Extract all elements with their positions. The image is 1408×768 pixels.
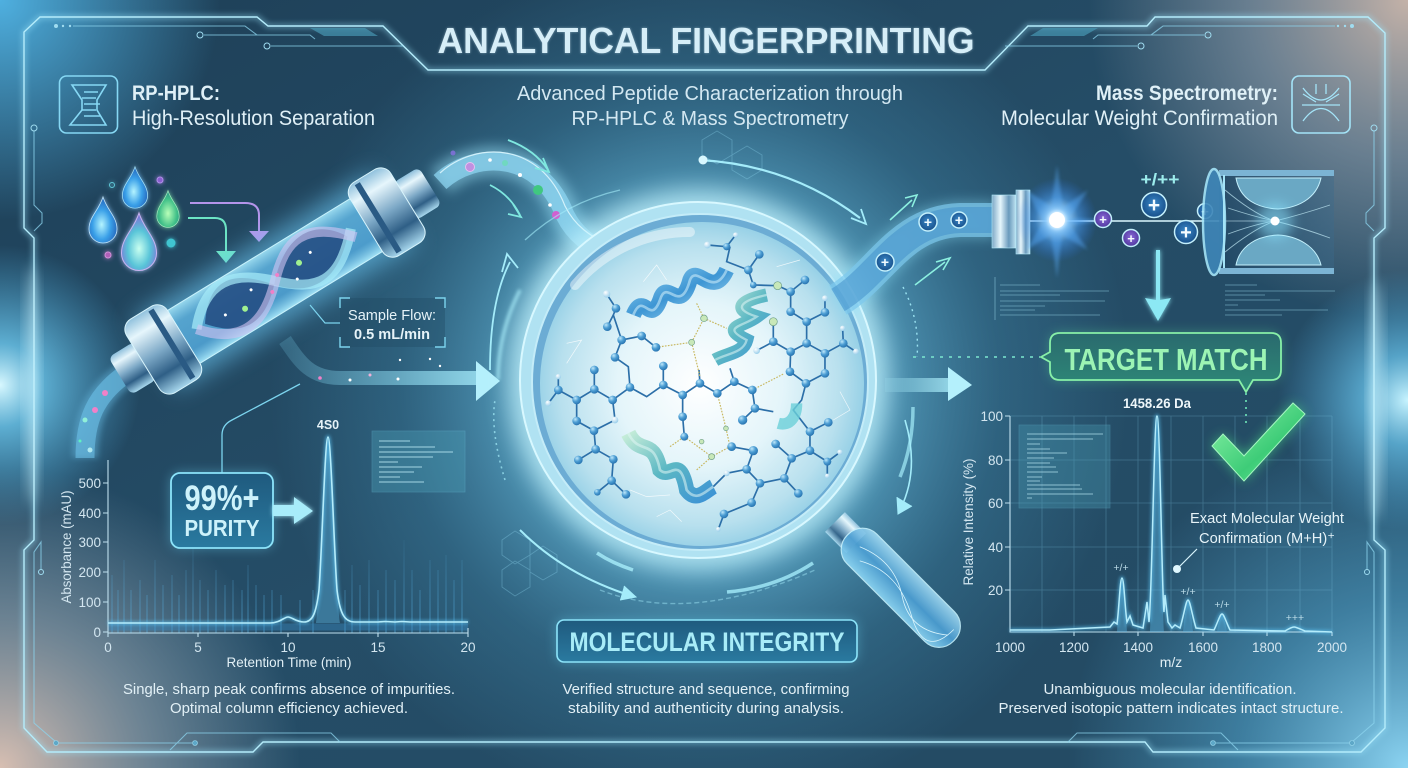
hydrogen bonds [656, 303, 783, 470]
trace [108, 437, 468, 623]
callout: sample flow [310, 298, 445, 347]
right cap [344, 149, 453, 262]
y axis title: Absorbance (mAU) [58, 490, 74, 604]
caption: HPLC: Single, sharp peak confirms absence of impurities. [123, 681, 455, 698]
y labels: 80 [988, 453, 1003, 468]
ions [1094, 170, 1212, 246]
x labels: 1200 [1059, 640, 1089, 655]
constellation lines [567, 260, 850, 522]
icon: ion trap [1292, 76, 1350, 133]
icon: check mark [1212, 403, 1305, 481]
tube into mass spectrometer: + [955, 212, 963, 228]
arrow: analyzer to target match [1145, 250, 1171, 321]
left cap [97, 300, 206, 413]
HPLC column [97, 149, 453, 413]
lower outlet tube [78, 373, 127, 458]
tube into mass spectrometer [838, 195, 995, 300]
annotation: Exact Molecular Weight [1190, 510, 1345, 527]
y tick labels: 300 [78, 535, 101, 550]
HPLC chromatogram [58, 384, 476, 670]
data notes [995, 277, 1335, 320]
arrow: lens to spectrum [885, 367, 972, 401]
handle [820, 507, 969, 656]
y labels: 20 [988, 583, 1003, 598]
arrow: solvent green [188, 218, 236, 263]
x tick labels: 5 [194, 640, 202, 655]
y tick labels: 400 [78, 506, 101, 521]
data panel [372, 431, 465, 492]
upper column tube [440, 140, 610, 255]
arrow: solvent purple [190, 203, 269, 242]
arrow: purity to peak [273, 497, 313, 524]
main peak label: 1458.26 Da [1123, 395, 1191, 411]
callout: target match [1041, 333, 1281, 392]
charge labels: +/+ [1214, 599, 1230, 611]
annotation: Confirmation (M+H)⁺ [1199, 530, 1335, 547]
panel: RP-HPLC heading: High-Resolution Separation [132, 107, 375, 130]
caption: center: Verified structure and sequence, confirming [562, 681, 850, 698]
x labels: 2000 [1317, 640, 1347, 655]
caption: mass spectrometry: Preserved isotopic pattern indicates intact structure. [998, 700, 1344, 717]
tube into mass spectrometer: + [881, 254, 889, 270]
data panel [1019, 425, 1110, 508]
x tick labels: 0 [104, 640, 112, 655]
arrow: sample flow to lens [285, 340, 500, 401]
dotted link to target match [913, 356, 1040, 358]
y tick labels: 100 [78, 595, 101, 610]
charge labels: +/+ [1180, 586, 1196, 598]
y labels: 40 [988, 540, 1003, 555]
panel: RP-HPLC heading [60, 76, 375, 133]
callout: purity: 99%+ [184, 479, 260, 518]
magnifying lens [508, 190, 969, 656]
helix strands [183, 211, 367, 351]
caption: mass spectrometry [998, 681, 1344, 717]
x labels: 1800 [1252, 640, 1282, 655]
lens ring [520, 202, 876, 558]
axes [103, 460, 468, 637]
hexagons [502, 131, 762, 596]
callout: molecular integrity: MOLECULAR INTEGRITY [570, 627, 844, 657]
y tick labels [78, 476, 101, 640]
caption: HPLC: Optimal column efficiency achieved. [170, 700, 408, 717]
icon: column [60, 76, 118, 133]
x axis title: m/z [1160, 654, 1182, 670]
y tick labels: 0 [93, 625, 101, 640]
peak label: 4S0 [317, 418, 339, 432]
helix ribbons [628, 270, 797, 496]
x labels [995, 640, 1347, 655]
mass analyzer [1203, 169, 1334, 275]
callout: molecular integrity [557, 620, 857, 662]
ions: + [1201, 204, 1209, 219]
title: ANALYTICAL FINGERPRINTING [438, 20, 974, 61]
ions: + [1180, 222, 1192, 244]
caption: HPLC [123, 681, 455, 717]
noise bars [112, 540, 462, 633]
sulfur atoms [689, 282, 782, 460]
flash [1017, 178, 1097, 262]
x tick labels: 10 [280, 640, 296, 655]
beam [1030, 216, 1280, 226]
light atoms [545, 232, 859, 532]
y labels [980, 409, 1003, 598]
callout: target match: TARGET MATCH [1064, 342, 1268, 377]
ions: + [1127, 231, 1135, 246]
charge labels [1113, 562, 1304, 624]
x tick labels: 15 [370, 640, 386, 655]
ion source [992, 165, 1280, 278]
caption: center [562, 681, 850, 717]
y labels: 60 [988, 496, 1003, 511]
heading text: Mass Spectrometry: [1096, 82, 1278, 105]
axes [1005, 416, 1332, 636]
dotted link to check [1245, 393, 1247, 427]
lens glass [540, 222, 864, 546]
droplets [89, 167, 179, 270]
y tick labels: 500 [78, 476, 101, 491]
peak fill [316, 437, 340, 623]
atoms [554, 243, 848, 518]
subtitle [517, 83, 903, 130]
subtitle: RP-HPLC & Mass Spectrometry [572, 108, 848, 130]
bonds [548, 235, 856, 529]
charge labels: +/+ [1113, 562, 1129, 574]
ions: + [1099, 212, 1107, 227]
callout: sample flow: 0.5 mL/min [354, 327, 430, 343]
y tick labels: 200 [78, 565, 101, 580]
x labels: 1400 [1123, 640, 1153, 655]
charge label: +/++ [1140, 170, 1180, 189]
packed interior [192, 215, 360, 345]
subtitle: Advanced Peptide Characterization through [517, 83, 903, 105]
heading text: Molecular Weight Confirmation [1001, 107, 1278, 130]
mass spectrum [960, 395, 1347, 670]
molecule [545, 232, 859, 532]
spectrum line [1010, 416, 1332, 632]
callout: purity [171, 473, 273, 548]
heading text [1001, 82, 1278, 130]
x labels: 1600 [1188, 640, 1218, 655]
x tick labels [104, 640, 476, 655]
charge labels: +++ [1286, 612, 1304, 624]
y axis title: Relative Intensity (%) [960, 458, 976, 586]
tube into mass spectrometer: + [924, 214, 932, 230]
ions in tube [876, 212, 967, 271]
caption: mass spectrometry: Unambiguous molecular identification. [1044, 681, 1296, 698]
callout: purity: PURITY [184, 515, 260, 541]
spectrum fill [1117, 416, 1227, 632]
y labels: 100 [980, 409, 1003, 424]
orbit arrows around lens [490, 156, 917, 604]
caption: center: stability and authenticity during analysis. [568, 700, 844, 717]
callout: sample flow: Sample Flow: [348, 308, 436, 324]
x tick labels: 20 [460, 640, 476, 655]
x axis title: Retention Time (min) [226, 654, 352, 670]
x labels: 1000 [995, 640, 1025, 655]
heading text: RP-HPLC: [132, 82, 220, 105]
panel: mass spectrometry heading [1001, 76, 1350, 133]
glass tube [158, 193, 392, 369]
ions: + [1148, 194, 1160, 217]
99 percent leader [222, 384, 300, 473]
connector: lens to integrity box [705, 556, 707, 620]
lens glow [508, 190, 888, 570]
grid [1010, 416, 1332, 632]
annotation [1173, 510, 1345, 573]
spectrum glow [1010, 416, 1332, 632]
